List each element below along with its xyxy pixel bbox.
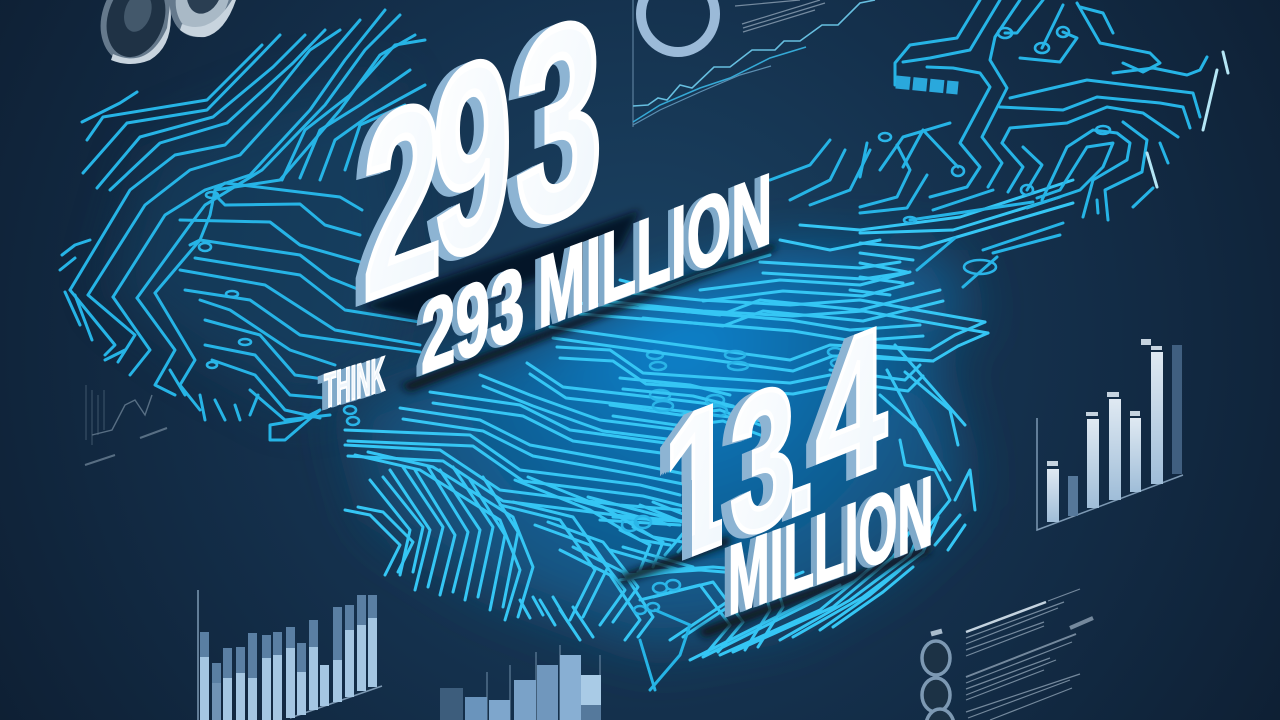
headline number: 13.4: 3 [730, 338, 796, 582]
headline number: 13.4: 1 [663, 353, 735, 608]
central circuit traces [344, 262, 985, 510]
chart notes [735, 0, 825, 32]
headline number: 293: 9 [433, 0, 512, 318]
headline number: 293 [363, 0, 602, 355]
headline number: 13.4: 4 [816, 283, 887, 533]
west map glow [110, 80, 410, 410]
south traces second layer [358, 452, 938, 657]
label: 13.4 MILLION: MILLION [728, 455, 934, 636]
text block lines [966, 589, 1093, 720]
trend lines [633, 0, 875, 106]
bottom right info panel [922, 589, 1093, 720]
contact shadows [362, 210, 930, 638]
label: 293 MILLION: 293 [421, 244, 524, 397]
north-central fan traces [620, 180, 1073, 295]
headline number: 13.4 [660, 326, 888, 561]
north-east circuit traces [770, 0, 1228, 287]
west circuit traces [60, 10, 425, 440]
south tail trace [640, 610, 690, 690]
headline number: 293: 2 [363, 44, 442, 355]
label: 293 MILLION: MILLION [538, 151, 772, 350]
central traces second layer [347, 273, 988, 521]
faint left mini chart [85, 385, 167, 465]
bar chart: bottom left [198, 590, 382, 720]
ring icons [922, 641, 954, 720]
west horizontal traces [180, 183, 420, 420]
top line chart with donut [633, 0, 875, 127]
chart axis [632, 0, 634, 127]
east diagonal traces [880, 345, 975, 550]
headline number: 13.4: . [786, 362, 817, 552]
map glow [345, 250, 975, 650]
donut gauge [641, 0, 715, 52]
icon: top-left dial gauges [93, 0, 243, 68]
label: 293 MILLION [421, 151, 772, 397]
bar chart: right [1037, 339, 1183, 530]
bar chart: bottom centre [440, 645, 601, 720]
small caption text: THINK [324, 346, 385, 418]
south circuit traces [345, 455, 925, 660]
